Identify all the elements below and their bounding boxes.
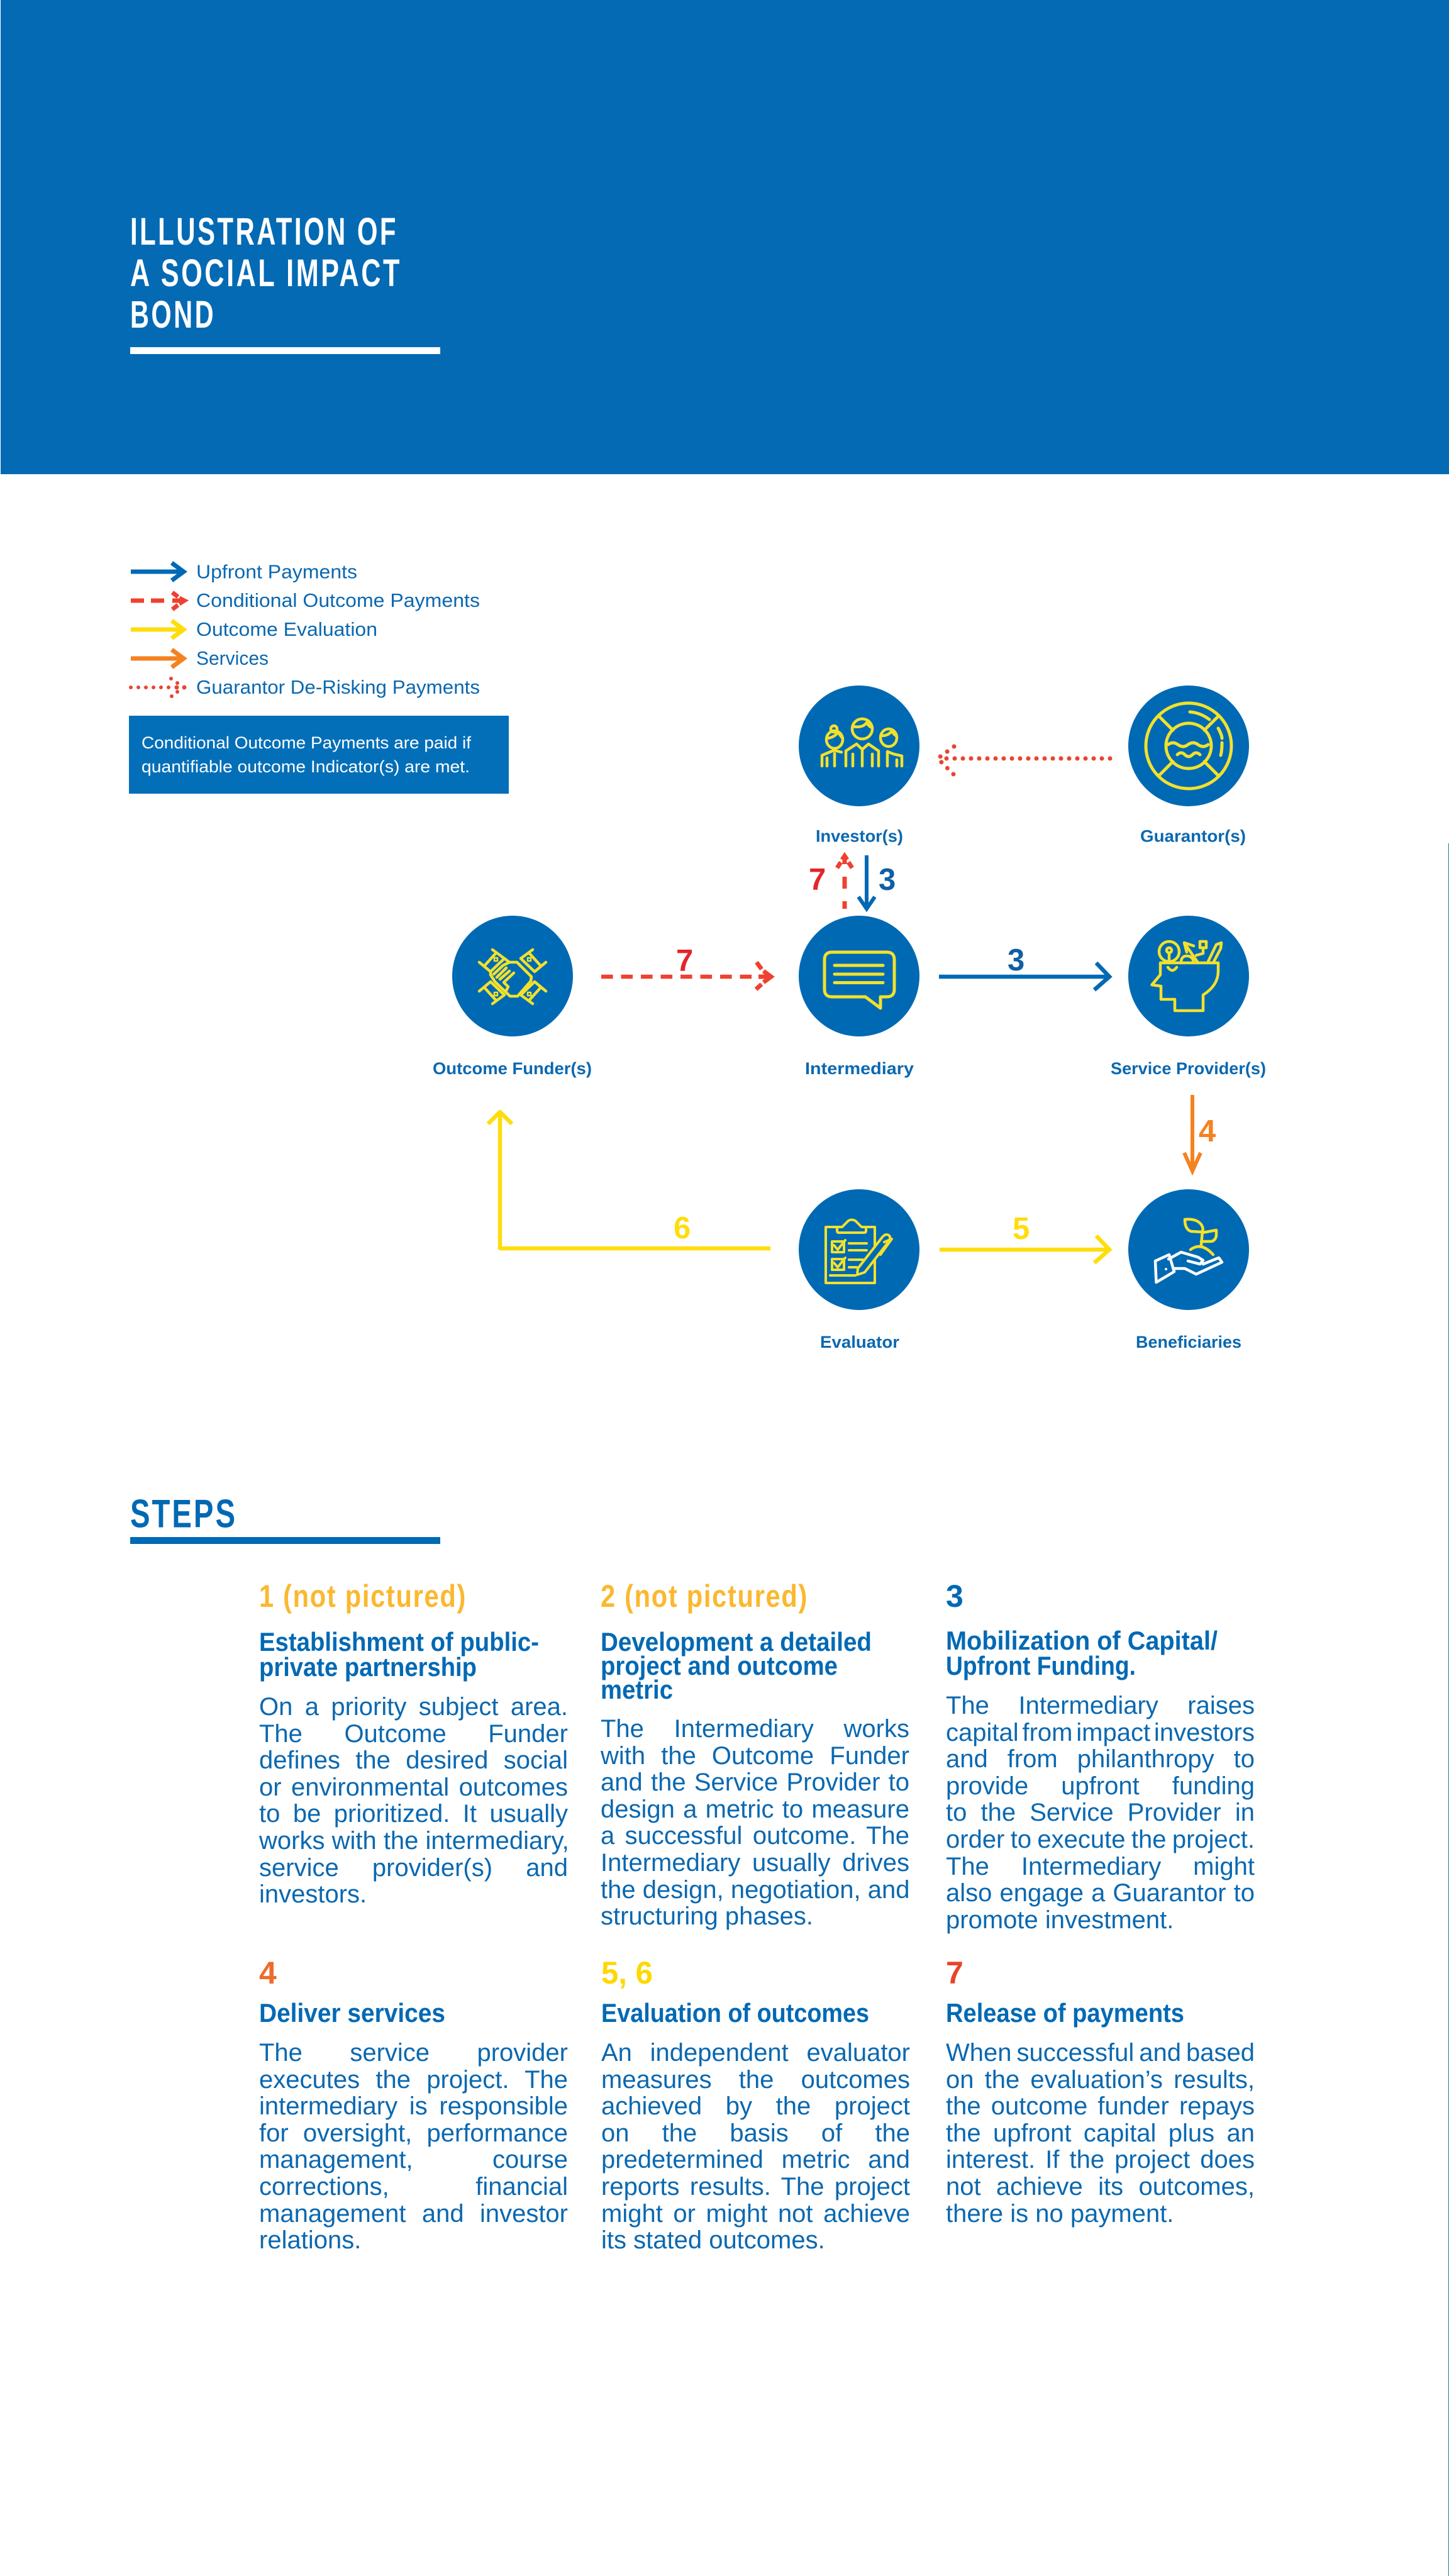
legend: upfront payments: [131, 561, 357, 582]
step 3: to the Service Provider in: [946, 1799, 1255, 1826]
step 2: the design, negotiation, and: [601, 1876, 910, 1904]
legend: services: [131, 647, 269, 669]
node: intermediary: [799, 916, 919, 1078]
step 5, 6: Evaluation of outcomes: [601, 1998, 869, 2028]
step 5, 6: [601, 1955, 910, 2254]
step 2: design a metric to measure: [601, 1796, 909, 1823]
step 3: and from philanthropy to: [946, 1745, 1255, 1773]
step 1: works with the intermediary,: [259, 1827, 569, 1855]
step 2: structuring phases.: [601, 1902, 813, 1930]
step 1: The Outcome Funder: [259, 1720, 568, 1748]
right edge rule: [1448, 843, 1449, 2576]
step 2: with the Outcome Funder: [601, 1742, 909, 1770]
step 2: Intermediary usually drives: [601, 1849, 909, 1877]
steps heading: STEPS: [130, 1492, 237, 1536]
node: service providers: Service Provider(s): [1111, 1059, 1266, 1078]
step 7: [946, 1955, 1255, 2228]
step 7: the outcome funder repays: [946, 2092, 1255, 2120]
title: ILLUSTRATION OF: [130, 210, 398, 253]
arrow: evaluator to beneficiaries, step 5: [940, 1212, 1109, 1263]
legend: guarantor de-risking payments: Guarantor De-Risking Payments: [196, 676, 480, 698]
step 4: Deliver services: [259, 1998, 445, 2028]
node: evaluator: Evaluator: [820, 1333, 899, 1352]
node: guarantors: Guarantor(s): [1140, 826, 1246, 845]
node: service providers: [1111, 916, 1266, 1078]
step 4: management, course: [259, 2146, 568, 2174]
title: [130, 210, 440, 354]
arrow: intermediary to investor, step 7 (dashed): [809, 856, 852, 909]
arrow: service provider to beneficiaries, step 4: 4: [1199, 1114, 1216, 1148]
step 4: executes the project. The: [259, 2066, 568, 2094]
arrow: outcome funder to intermediary, step 7 (dashed): [601, 944, 771, 989]
step 7: the upfront capital plus an: [946, 2119, 1255, 2147]
step 7: on the evaluation’s results,: [946, 2066, 1255, 2094]
step 7: there is no payment.: [946, 2200, 1174, 2228]
step 4: management and investor: [259, 2200, 568, 2228]
step 2: and the Service Provider to: [601, 1768, 909, 1796]
step 3: The Intermediary raises: [946, 1692, 1255, 1719]
arrow: evaluator to outcome funder, step 6: 6: [674, 1211, 691, 1245]
step 4: [259, 1955, 568, 2254]
steps heading: [130, 1492, 440, 1544]
step 3: order to execute the project.: [946, 1826, 1255, 1853]
legend: outcome evaluation: Outcome Evaluation: [196, 618, 377, 640]
step 1: private partnership: [259, 1652, 477, 1682]
step 2: a successful outcome. The: [601, 1822, 909, 1850]
step 1: [259, 1579, 569, 1908]
step 3: promote investment.: [946, 1906, 1174, 1934]
title: A SOCIAL IMPACT: [130, 252, 402, 294]
step 3: [946, 1579, 1255, 1934]
step 5, 6: 5, 6: [601, 1955, 653, 1990]
node: investors: Investor(s): [816, 826, 903, 845]
step 3: also engage a Guarantor to: [946, 1879, 1255, 1907]
node: guarantors: [1128, 686, 1249, 845]
step 1: defines the desired social: [259, 1746, 568, 1774]
legend: upfront payments: Upfront Payments: [196, 561, 357, 582]
node: outcome funders: [433, 916, 592, 1078]
step 3: capital from impact investors: [946, 1719, 1255, 1746]
step 7: interest. If the project does: [946, 2146, 1255, 2174]
step 1: service provider(s) and: [259, 1854, 568, 1882]
step 4: for oversight, performance: [259, 2119, 568, 2147]
arrow: intermediary to investor, step 7 (dashed): 7: [809, 863, 826, 897]
step 4: intermediary is responsible: [259, 2092, 568, 2120]
arrow: outcome funder to intermediary, step 7 (dashed): 7: [676, 944, 693, 978]
step 4: corrections, financial: [259, 2173, 568, 2201]
node: outcome funders: Outcome Funder(s): [433, 1059, 592, 1078]
header band: [1, 0, 1449, 474]
callout: conditional payments note: [129, 716, 509, 794]
step 3: 3: [946, 1579, 963, 1614]
step 3: Mobilization of Capital/: [946, 1626, 1218, 1655]
step 1: to be prioritized. It usually: [259, 1800, 568, 1828]
step 2: metric: [601, 1675, 673, 1704]
step 1: Establishment of public-: [259, 1627, 539, 1657]
callout: conditional payments note: quantifiable outcome Indicator(s) are met.: [142, 757, 470, 776]
step 5, 6: its stated outcomes.: [601, 2226, 825, 2254]
step 3: provide upfront funding: [946, 1772, 1255, 1800]
step 2: The Intermediary works: [601, 1715, 909, 1743]
step 1: investors.: [259, 1880, 367, 1908]
arrow: evaluator to beneficiaries, step 5: 5: [1013, 1212, 1030, 1246]
node: investors: [799, 686, 919, 845]
node: beneficiaries: [1128, 1189, 1249, 1352]
legend: conditional outcome payments: Conditional Outcome Payments: [196, 589, 480, 611]
step 2: [601, 1579, 910, 1930]
step 2: Development a detailed: [601, 1627, 872, 1657]
title: BOND: [130, 293, 216, 336]
step 5, 6: on the basis of the: [601, 2119, 910, 2147]
step 1: On a priority subject area.: [259, 1693, 568, 1721]
node: intermediary: Intermediary: [805, 1059, 914, 1078]
arrow: intermediary to service provider, step 3: [939, 943, 1109, 990]
step 5, 6: measures the outcomes: [601, 2066, 910, 2094]
step 2: 2 (not pictured): [601, 1579, 808, 1614]
arrow: investor to intermediary, step 3: 3: [879, 863, 896, 897]
step 7: 7: [946, 1955, 963, 1990]
arrow: evaluator to outcome funder, step 6: [488, 1112, 770, 1248]
node: evaluator: [799, 1189, 919, 1352]
step 5, 6: predetermined metric and: [601, 2146, 910, 2174]
step 5, 6: reports results. The project: [601, 2173, 910, 2201]
step 7: Release of payments: [946, 1998, 1184, 2028]
legend: services: Services: [196, 647, 269, 669]
step 4: relations.: [259, 2226, 361, 2254]
legend: [129, 561, 480, 698]
arrow: intermediary to service provider, step 3: 3: [1008, 943, 1024, 977]
step 4: 4: [259, 1955, 277, 1990]
step 7: not achieve its outcomes,: [946, 2173, 1255, 2201]
arrow: investor to intermediary, step 3: [858, 855, 896, 909]
step 1: 1 (not pictured): [259, 1579, 467, 1614]
arrow: service provider to beneficiaries, step 4: [1184, 1095, 1216, 1171]
step 7: When successful and based: [946, 2039, 1255, 2067]
step 3: Upfront Funding.: [946, 1651, 1136, 1680]
step 4: The service provider: [259, 2039, 568, 2067]
node: beneficiaries: Beneficiaries: [1136, 1333, 1241, 1352]
step 3: The Intermediary might: [946, 1853, 1255, 1880]
step 1: or environmental outcomes: [259, 1774, 568, 1801]
arrow: guarantor to investor (dotted): [938, 747, 1110, 774]
step 5, 6: An independent evaluator: [601, 2039, 910, 2067]
step 5, 6: might or might not achieve: [601, 2200, 910, 2228]
flow diagram: [433, 686, 1266, 1352]
callout: conditional payments note: Conditional Outcome Payments are paid if: [142, 733, 472, 752]
step 5, 6: achieved by the project: [601, 2092, 910, 2120]
step 2: project and outcome: [601, 1651, 838, 1680]
